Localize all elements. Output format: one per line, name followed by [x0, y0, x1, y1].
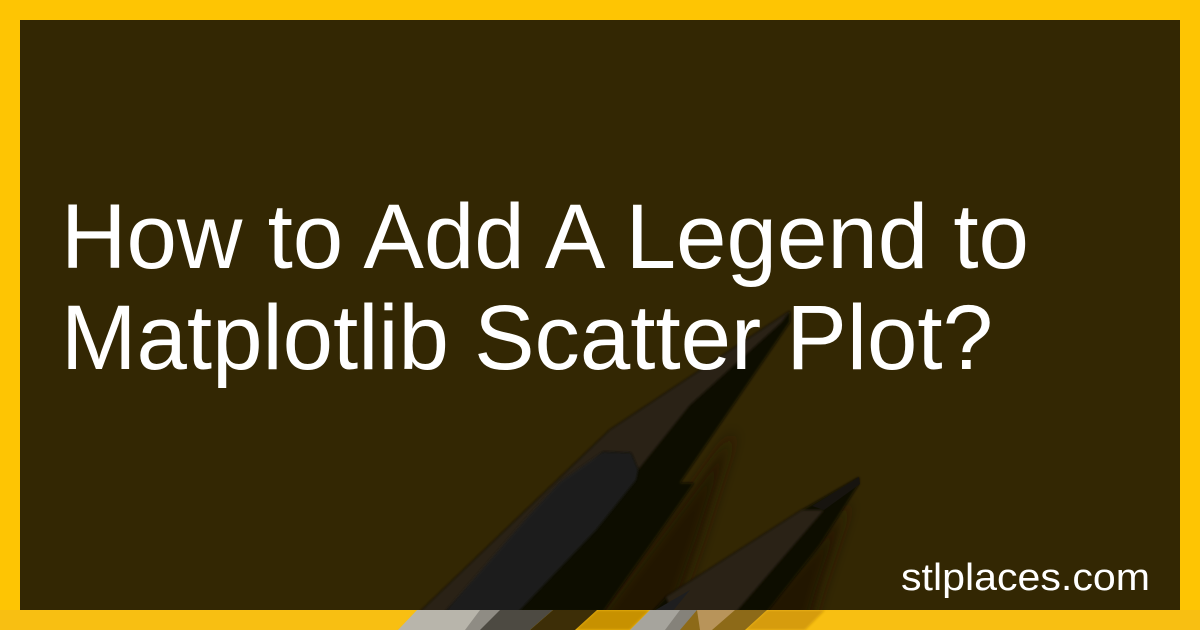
small pencil graphite tip	[812, 477, 860, 510]
icon: large pencil	[420, 311, 790, 612]
small pencil shaded side	[652, 477, 859, 612]
large pencil lit wood	[420, 311, 790, 612]
pencil bottoms in yellow frame strip	[0, 610, 1200, 630]
small pencil grey paint	[656, 590, 690, 610]
large pencil grey paint	[445, 452, 638, 612]
site name: stlplaces.com	[901, 557, 1150, 599]
small pencil lit wood	[666, 510, 824, 612]
title	[61, 186, 1029, 389]
icon: pencil shadows on panel	[605, 441, 848, 610]
title line 1: How to Add A Legend to	[61, 186, 1029, 288]
large pencil shaded body	[420, 311, 790, 612]
title line 2: Matplotlib Scatter Plot?	[61, 287, 993, 389]
icon: small pencil	[652, 477, 860, 612]
